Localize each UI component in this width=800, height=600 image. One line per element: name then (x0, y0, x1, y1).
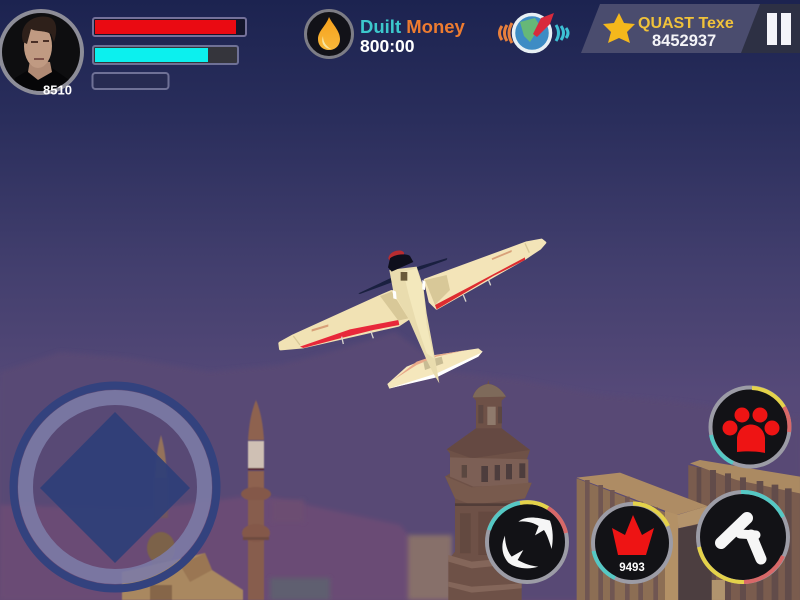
rear building (688, 460, 800, 600)
score panel (581, 4, 800, 53)
distant mountains (0, 332, 800, 600)
player avatar (0, 11, 82, 98)
energy bar (93, 46, 238, 64)
crown button (593, 504, 671, 582)
avatar score: 8510 (43, 82, 72, 98)
joystick inner light ring (26, 398, 204, 576)
fuselage (388, 251, 439, 383)
crown count: 9493 (619, 562, 645, 574)
hammer button (698, 492, 788, 582)
ornate tower (445, 380, 532, 600)
health bar (93, 18, 246, 36)
tailplane (387, 348, 483, 389)
small minaret and mosque roof (122, 435, 243, 600)
pause button (767, 13, 791, 45)
left wing (280, 292, 408, 349)
joystick diamond (40, 412, 190, 563)
currency label: Duilt Money (360, 16, 466, 37)
tan striped buildings (577, 460, 800, 600)
score number: 8452937 (652, 32, 716, 50)
paw button (710, 388, 790, 466)
empty bar (92, 73, 168, 89)
propeller (358, 258, 447, 294)
joystick (14, 386, 216, 588)
joystick outer dark ring (14, 386, 216, 588)
distant buildings (270, 500, 452, 600)
airplane (280, 240, 545, 389)
right wing (425, 240, 545, 309)
fuel icon (306, 10, 352, 58)
rotate button (487, 502, 567, 582)
radar globe icon (500, 13, 568, 52)
score label: QUAST Texe (638, 15, 734, 32)
currency amount: 800:00 (360, 36, 415, 56)
front building (577, 473, 712, 600)
icon: star (603, 13, 635, 43)
minaret, large (241, 400, 271, 600)
